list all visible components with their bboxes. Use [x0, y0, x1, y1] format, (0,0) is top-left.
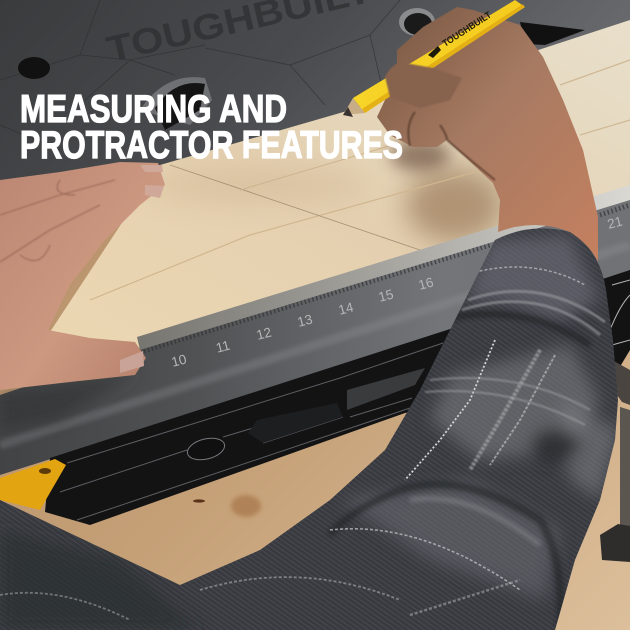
workbench top surface — [0, 0, 630, 200]
shirt sleeve — [0, 220, 630, 630]
title — [20, 88, 403, 167]
pencil: TOUGHBUILT — [441, 10, 494, 50]
title: MEASURING AND — [20, 88, 287, 131]
thumb over pencil — [385, 63, 462, 108]
ruler numbers: 16 — [417, 275, 435, 293]
ruler numbers: 10 — [170, 352, 188, 370]
title: PROTRACTOR FEATURES — [20, 124, 403, 167]
ruler rim — [137, 185, 630, 350]
right hand holding pencil — [377, 7, 598, 262]
bench leg — [600, 360, 630, 562]
ruler numbers — [170, 214, 624, 370]
ruler numbers: 13 — [296, 312, 314, 330]
ruler band along bench edge — [0, 198, 630, 475]
ruler numbers: 21 — [606, 214, 624, 232]
black rail under the ruler — [45, 270, 630, 525]
bench holes — [18, 8, 585, 130]
wood knot — [193, 495, 261, 517]
board: plywood sheet being marked — [48, 20, 630, 349]
yellow corner bracket — [0, 459, 66, 510]
left hand on the board — [0, 162, 165, 390]
ruler numbers: 11 — [214, 338, 232, 356]
ruler numbers: 15 — [377, 287, 395, 305]
pencil — [343, 0, 525, 117]
ruler numbers: 12 — [255, 325, 273, 343]
ruler numbers: 14 — [337, 299, 355, 318]
